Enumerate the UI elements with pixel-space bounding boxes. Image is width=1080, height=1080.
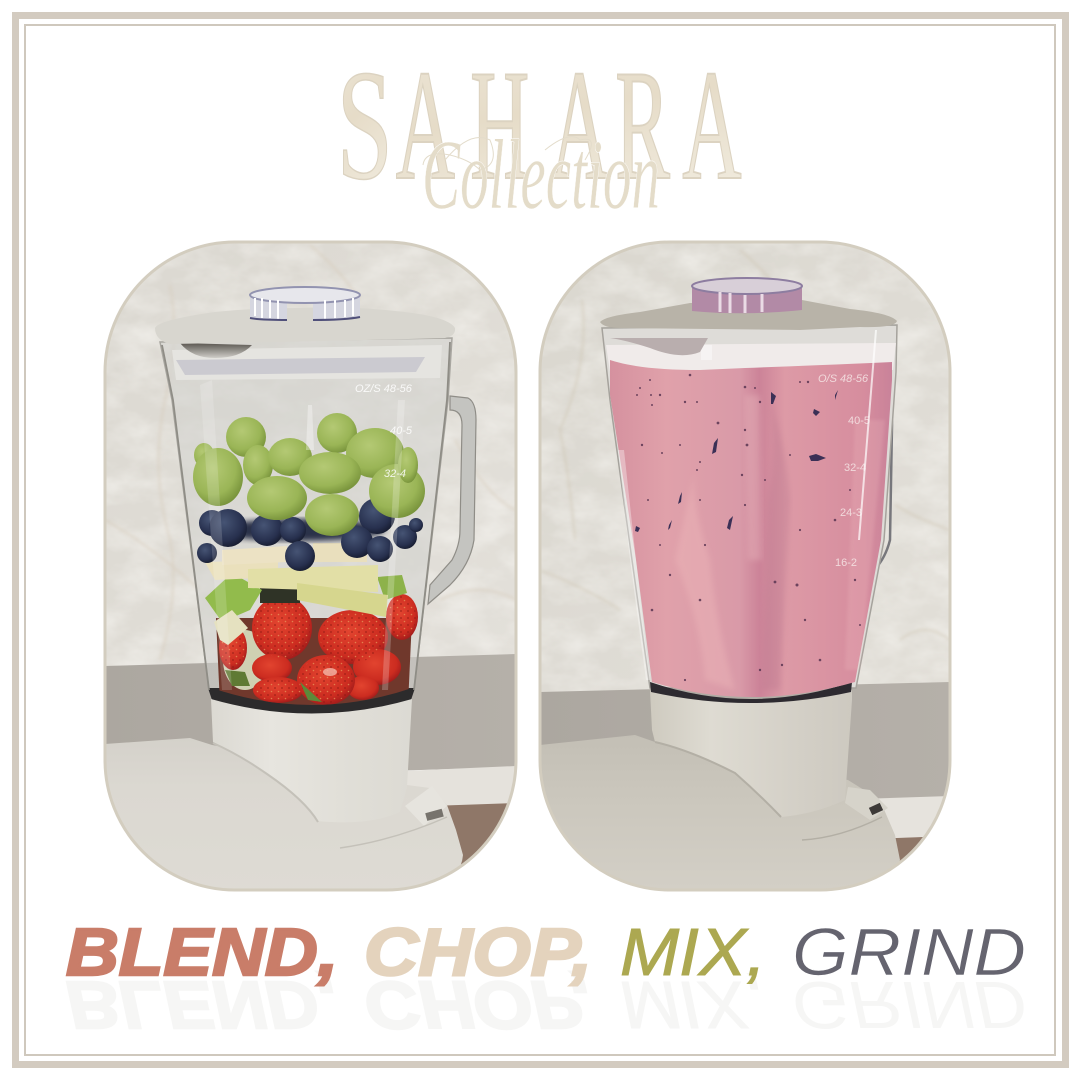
countertop: [540, 682, 950, 810]
motor ledge line: [340, 817, 447, 848]
panel border: [540, 242, 950, 890]
blueberries: [197, 498, 423, 571]
word: CHOP: CHOP,: [364, 915, 592, 990]
glass reflections: [200, 380, 405, 690]
black blade ring: [208, 688, 415, 714]
clear lid cap: [250, 287, 360, 320]
seal shadow: [176, 357, 425, 375]
grapes: [193, 413, 425, 536]
tagline reflection: MIX,: [620, 967, 766, 1042]
jar measurements: [355, 383, 413, 480]
jar measurements: [818, 373, 870, 569]
clear lid cap filled with smoothie: [692, 278, 802, 313]
jar measurements: 32-4: [384, 468, 406, 480]
tagline reflection: [66, 967, 1026, 1042]
collar shadow along motor dome: [213, 743, 318, 822]
tagline reflection: CHOP,: [364, 967, 592, 1042]
collar shadow along motor dome: [655, 742, 781, 817]
tagline: [66, 915, 1026, 990]
jar measurements: 16-2: [835, 557, 857, 569]
smoothie body: [610, 360, 892, 697]
smoothie milk line: [606, 343, 896, 372]
jar measurements: 24-3: [840, 507, 862, 519]
jar lid: [600, 300, 897, 330]
tagline reflection: GRIND: [792, 967, 1026, 1042]
blender collar: [211, 699, 412, 822]
blender collar: [650, 690, 852, 817]
fruit layers: [193, 413, 425, 705]
glass jar: [160, 338, 452, 706]
motor body: [540, 735, 900, 900]
smoothie shading: [675, 395, 885, 690]
power switch: [845, 787, 888, 820]
jar measurements: O/S 48-56: [818, 373, 869, 385]
jar lid: [155, 307, 455, 344]
subtitle script: Collection: Collection: [422, 119, 660, 230]
smoothie speckles: [636, 374, 861, 681]
word: MIX: MIX,: [620, 915, 766, 990]
lid seal band: [172, 345, 442, 380]
pour spout: [610, 338, 708, 355]
jar measurements: 40-5: [390, 425, 413, 437]
glass reflections: [618, 330, 877, 680]
word: BLEND: BLEND,: [66, 915, 338, 990]
title letters AHARA: AHARA: [396, 39, 742, 213]
jar handle: [428, 396, 476, 604]
jar measurements: 40-5: [848, 415, 870, 427]
banana and lime slices: [205, 543, 407, 645]
strawberries: [216, 594, 418, 705]
panel: blender with smoothie: [540, 242, 950, 900]
motor ledge line: [802, 817, 882, 840]
jar measurements: 32-4: [844, 462, 866, 474]
black ring: [650, 682, 852, 703]
panel border: [105, 242, 516, 890]
pour spout: [180, 343, 252, 358]
jar edges: [162, 342, 450, 690]
title: Sahara Collection logo: [337, 37, 742, 230]
countertop: [105, 654, 516, 780]
motor body: [105, 738, 463, 900]
word: GRIND: GRIND: [792, 915, 1026, 990]
blueberry flecks: [635, 390, 838, 532]
script flourishes: [423, 137, 591, 170]
title letter S: S: [337, 37, 393, 213]
jar measurements: OZ/S 48-56: [355, 383, 413, 395]
lower marble strip: [407, 766, 514, 806]
wood surface: [447, 803, 507, 864]
wood surface: [896, 837, 923, 861]
tagline reflection: BLEND,: [66, 967, 338, 1042]
power switch: [405, 786, 447, 826]
glass jar: [602, 325, 897, 688]
panel: blender with whole fruit: [105, 242, 516, 900]
jar handle: [880, 420, 894, 565]
lower marble strip: [878, 796, 944, 838]
marble wall background: [540, 242, 950, 702]
marble wall background: [105, 242, 516, 672]
